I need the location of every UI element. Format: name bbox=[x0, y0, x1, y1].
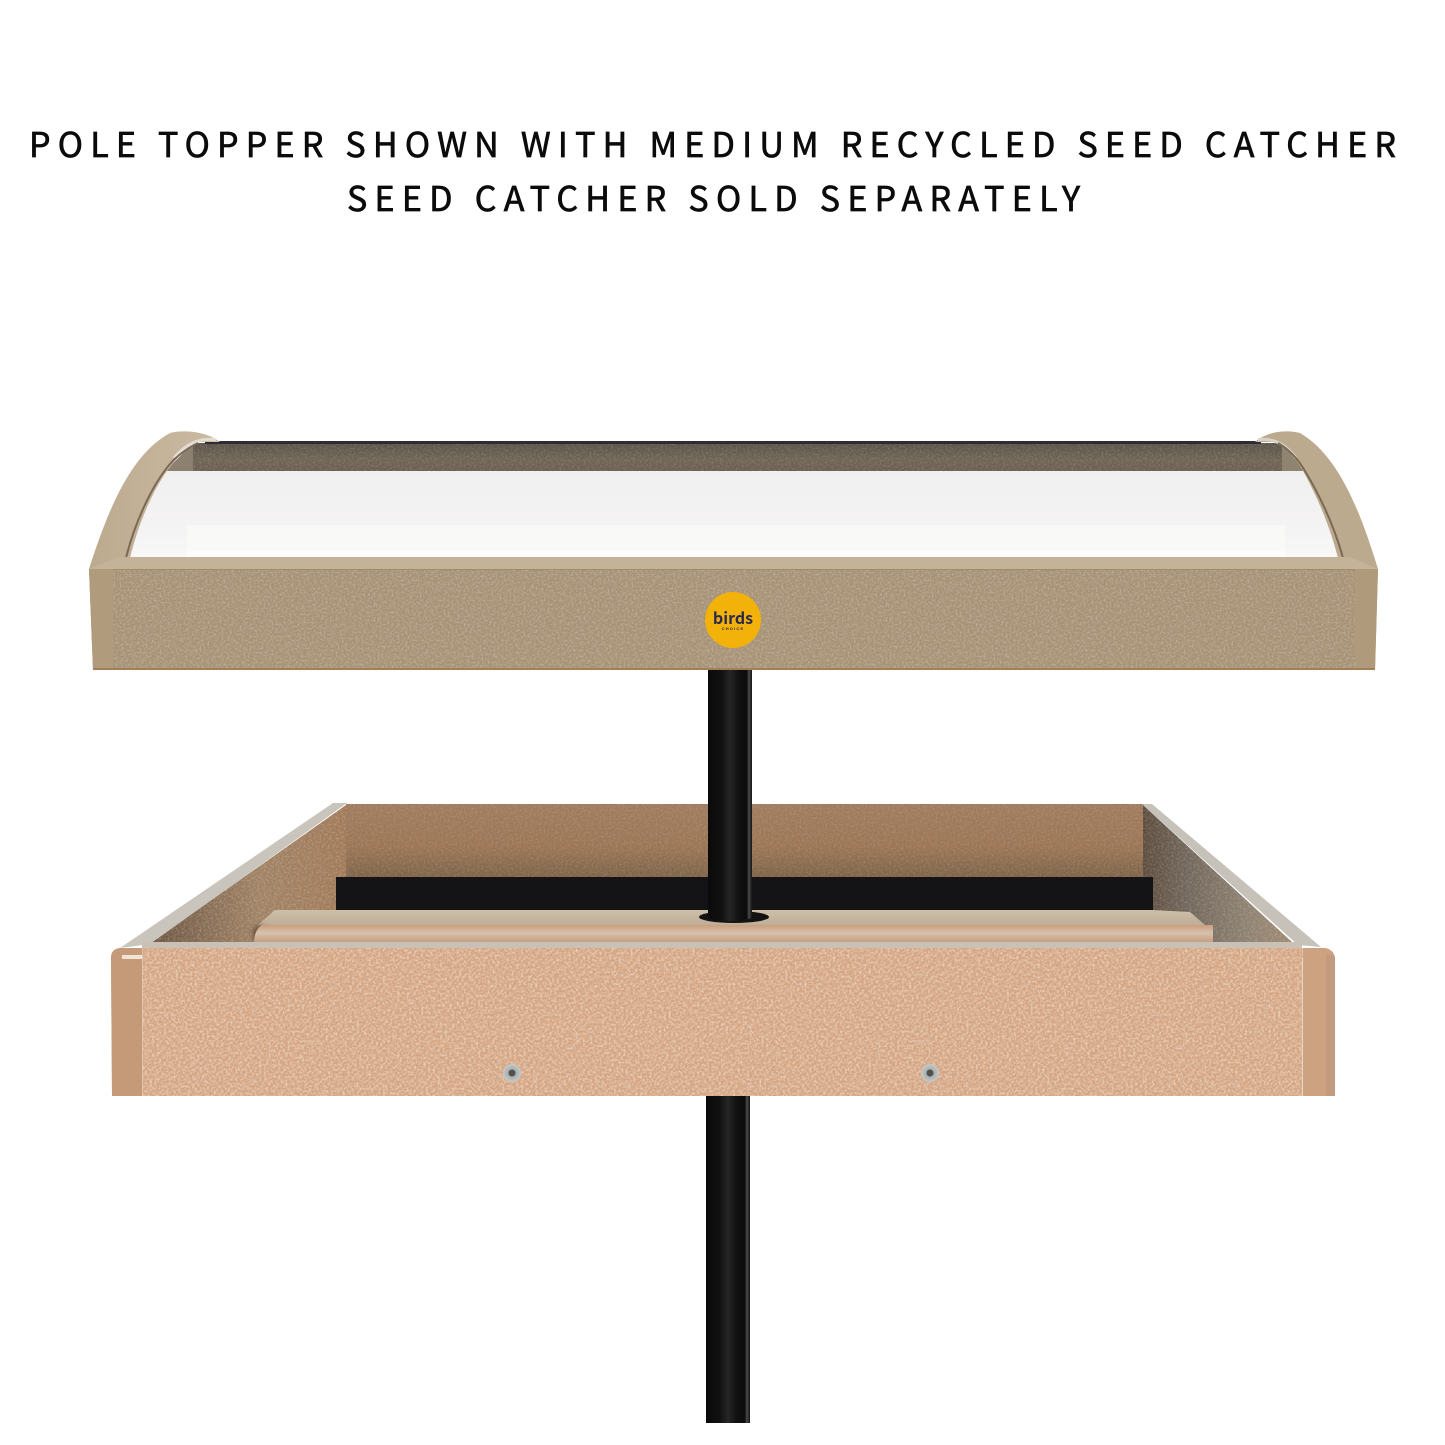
arch inner edge left bbox=[126, 443, 198, 558]
inner lighter panel bbox=[187, 525, 1285, 551]
screw left bbox=[503, 1064, 521, 1082]
back wall bbox=[160, 443, 1310, 471]
seed catcher tray bbox=[110, 803, 1336, 1098]
pole topper tray bbox=[88, 431, 1379, 671]
front face bbox=[110, 946, 1336, 1098]
heading line 1: POLE TOPPER SHOWN WITH MEDIUM RECYCLED SEED CATCHER bbox=[29, 118, 1396, 167]
heading bbox=[29, 118, 1396, 221]
upper pole bbox=[708, 670, 752, 921]
top ledge bbox=[89, 557, 1378, 569]
right rim bbox=[1142, 804, 1321, 947]
front cross strip bbox=[254, 925, 1213, 943]
heading line 2: SEED CATCHER SOLD SEPARATELY bbox=[347, 172, 1081, 221]
pole hole bbox=[699, 911, 769, 923]
white tray surface bbox=[130, 471, 1338, 558]
floor bar shadow bbox=[253, 926, 267, 942]
back wall bbox=[346, 804, 1144, 880]
screw right bbox=[921, 1064, 939, 1082]
front face bbox=[88, 568, 1379, 671]
left rim bbox=[120, 803, 347, 948]
logo wordmark: birds bbox=[713, 605, 753, 629]
right inner wall bbox=[1143, 804, 1293, 944]
black cross bar bbox=[336, 877, 1153, 910]
left inner wall bbox=[150, 804, 347, 944]
logo bbox=[705, 592, 761, 648]
right arch bbox=[1255, 431, 1378, 569]
floor bar bbox=[258, 910, 1205, 925]
right arch highlight bbox=[1258, 439, 1296, 458]
right end cap bbox=[1355, 569, 1379, 671]
left arch highlight bbox=[174, 439, 216, 458]
bottom panel strip bbox=[187, 551, 1285, 558]
left end cap bbox=[110, 946, 142, 1098]
logo subtext: CHOICE bbox=[722, 626, 744, 631]
lower pole bbox=[706, 1095, 750, 1423]
left arch bbox=[89, 431, 220, 569]
left end cap bbox=[88, 569, 113, 671]
dark top edge bbox=[205, 441, 1261, 444]
right end cap bbox=[1303, 946, 1336, 1098]
front top strip bbox=[142, 942, 1302, 948]
arch inner edge right bbox=[1278, 443, 1343, 558]
